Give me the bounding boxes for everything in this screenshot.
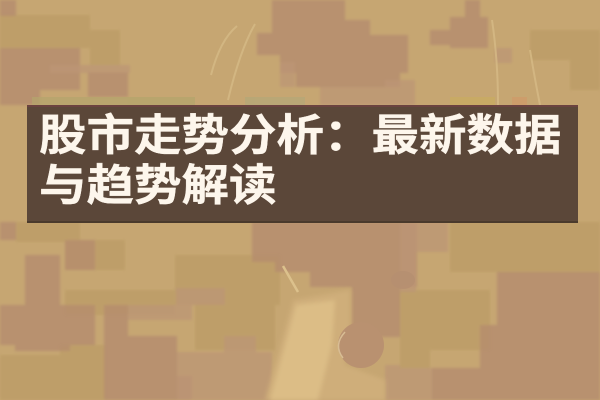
title	[39, 112, 562, 211]
title: 与趋势解读	[39, 162, 276, 211]
title: 股市走势分析：最新数据	[39, 112, 562, 161]
title band	[27, 105, 578, 223]
strips just above the band	[32, 97, 527, 105]
